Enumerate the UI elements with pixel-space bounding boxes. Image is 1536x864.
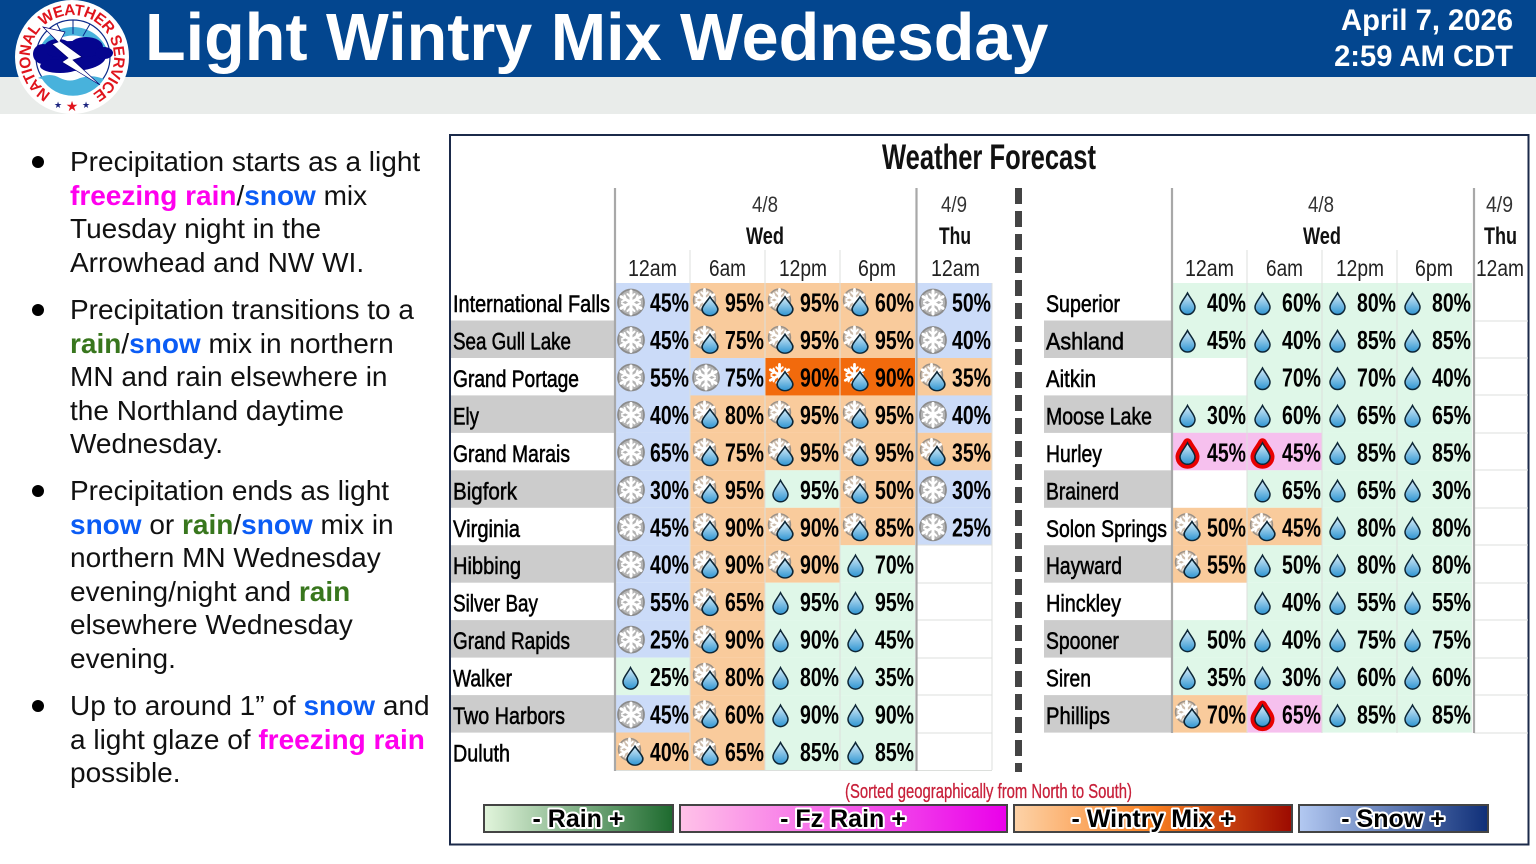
light strip below header [0,77,1536,114]
row: Two Harbors: 60% [725,702,764,730]
row: Silver Bay: 65% [725,589,764,617]
row: Ely: 80% [725,402,764,430]
row: Spooner: 75% [1432,627,1471,655]
row: Aitkin [1046,358,1472,396]
table header: left [628,192,980,281]
row: Moose Lake: 65% [1357,402,1396,430]
row: Virginia: 90% [800,514,839,542]
row: Walker [453,658,915,695]
row: Brainerd: Brainerd [1046,478,1119,505]
bullet: precipitation start [32,146,420,278]
legend: snow [1299,805,1488,833]
bullet: precipitation start: Arrowhead and NW WI. [70,247,364,278]
row: Hayward: Hayward [1046,553,1122,580]
row: Duluth: 40% [650,739,689,767]
row: Hibbing: 90% [725,552,764,580]
title: Light Wintry Mix Wednesday [145,1,1048,75]
row: Bigfork: 50% [875,477,914,505]
bullet: accumulation: Up to around 1” of snow and [70,690,430,721]
row: Grand Portage: 55% [650,364,689,392]
bullet: precipitation transition: the Northland daytime [70,395,344,426]
table header: left: 4/9 [941,192,967,217]
row: Solon Springs: 80% [1432,514,1471,542]
row: Grand Rapids [451,620,915,658]
row: Sea Gull Lake: 45% [650,327,689,355]
row: Walker: 35% [875,664,914,692]
row: Spooner: 50% [1207,627,1246,655]
row: Duluth: 85% [875,739,914,767]
row: Bigfork: 30% [650,477,689,505]
row: Two Harbors: 45% [650,702,689,730]
bullet: accumulation: a light glaze of freezing rain [70,724,425,755]
row: Solon Springs: 50% [1207,514,1246,542]
row: Grand Marais: 95% [800,439,839,467]
row: Two Harbors: 90% [800,702,839,730]
table header: left: 12am [931,255,980,281]
row: International Falls: 50% [952,290,991,318]
row: Grand Rapids: 25% [650,627,689,655]
row: Hibbing: 90% [800,552,839,580]
row: Hayward: 55% [1207,552,1246,580]
row: Sea Gull Lake: Sea Gull Lake [453,328,571,356]
icon: National Weather Service logo: ★ [66,99,78,115]
row: Superior [1046,283,1472,320]
bullet: precipitation transition: Precipitation transitions to a [70,294,414,325]
date and time [1334,5,1513,73]
bullet: precipitation end: Precipitation ends as light [70,475,389,506]
table header: left: Thu [939,223,971,250]
row: Moose Lake: Moose Lake [1046,403,1152,430]
bullet: accumulation [32,690,430,788]
row: Siren: Siren [1046,666,1091,693]
row: Hayward [1044,545,1472,583]
row: Superior: Superior [1046,291,1120,318]
row: Ashland: Ashland [1046,328,1124,356]
legend: wintry mix [1014,805,1292,833]
row: Sea Gull Lake: 95% [875,327,914,355]
row: Aitkin: 70% [1357,364,1396,392]
row: Ely: 95% [800,402,839,430]
row: Grand Marais: 35% [952,439,991,467]
bullet: precipitation transition: rain/snow mix in northern [70,328,394,359]
row: Walker: 25% [650,664,689,692]
row: Moose Lake: 60% [1282,402,1321,430]
row: Grand Portage: 35% [952,364,991,392]
table header: right [1185,192,1524,281]
row: International Falls: 45% [650,290,689,318]
row: Hayward: 80% [1357,552,1396,580]
panel: weather forecast [449,134,1530,846]
row: Hinckley: Hinckley [1046,591,1122,618]
row: Phillips: 85% [1357,702,1396,730]
row: Hayward: 80% [1432,552,1471,580]
row: Brainerd: 65% [1357,477,1396,505]
row: Brainerd: 30% [1432,477,1471,505]
row: Ely: 40% [952,402,991,430]
legend: wintry mix: - Wintry Mix + [1072,805,1234,833]
row: Hinckley: 55% [1432,589,1471,617]
row: Silver Bay: 95% [800,589,839,617]
row: Brainerd: 65% [1282,477,1321,505]
row: Phillips: Phillips [1046,703,1110,730]
row: Bigfork: Bigfork [453,478,518,505]
icon: National Weather Service logo: NATIONAL WEATHER SERVICE [19,4,125,102]
row: Ely: Ely [453,403,480,430]
row: Walker: 80% [800,664,839,692]
row: International Falls: 95% [725,290,764,318]
row: Phillips [1044,695,1472,733]
row: Grand Portage: 90% [800,364,839,392]
row: Grand Marais: 75% [725,439,764,467]
row: Grand Rapids: 90% [725,627,764,655]
row: Siren [1046,658,1472,695]
row: Ely: 40% [650,402,689,430]
bullet: precipitation end: snow or rain/snow mix in [70,509,394,540]
row: Bigfork: 95% [725,477,764,505]
row: Ashland: 40% [1282,327,1321,355]
row: Solon Springs [1046,508,1472,545]
row: Hurley: 45% [1207,439,1246,467]
row: Grand Rapids: 90% [800,627,839,655]
row: Hibbing: Hibbing [453,553,521,580]
row: Sea Gull Lake: 95% [800,327,839,355]
row: Grand Marais: 95% [875,439,914,467]
bullet: precipitation start: Tuesday night in the [70,213,321,244]
row: Grand Portage: 75% [725,364,764,392]
row: Hinckley: 40% [1282,589,1321,617]
legend: freezing rain [680,805,1007,833]
row: Ashland: 85% [1432,327,1471,355]
row: Hurley: Hurley [1046,441,1103,468]
row: Ely: 95% [875,402,914,430]
bullet: precipitation end: elsewhere Wednesday [70,609,353,640]
row: Siren: 30% [1282,664,1321,692]
bullet: precipitation transition [32,294,414,459]
row: Duluth [453,732,915,770]
row: Bigfork [451,470,992,508]
table header: right: Thu [1484,223,1517,250]
row: Moose Lake [1044,395,1472,433]
row: Hibbing: 40% [650,552,689,580]
row: Sea Gull Lake: 40% [952,327,991,355]
row: Phillips: 65% [1282,702,1321,730]
row: Virginia: 45% [650,514,689,542]
row: Superior: 80% [1432,290,1471,318]
table header: right: Wed [1303,223,1341,250]
row: International Falls: International Falls [453,291,610,318]
row: Phillips: 70% [1207,702,1246,730]
row: Silver Bay: 95% [875,589,914,617]
header band [0,0,1536,77]
row: Aitkin: 40% [1432,364,1471,392]
row: Virginia [453,508,992,545]
row: Siren: 35% [1207,664,1246,692]
row: Grand Marais: Grand Marais [453,441,570,468]
bullet: precipitation transition: Wednesday. [70,428,223,459]
row: Hibbing: 70% [875,552,914,580]
row: Superior: 40% [1207,290,1246,318]
table header: left: Wed [746,223,784,250]
row: Grand Rapids: 45% [875,627,914,655]
row: Silver Bay [453,583,915,620]
row: Grand Portage [453,358,992,396]
icon: National Weather Service logo: ★ [54,101,62,111]
row: Spooner: 40% [1282,627,1321,655]
row: Hayward: 50% [1282,552,1321,580]
row: Walker: 80% [725,664,764,692]
legend: rain [484,805,673,833]
row: Sea Gull Lake [451,320,992,358]
row: Sea Gull Lake: 75% [725,327,764,355]
row: Two Harbors [451,695,915,733]
row: International Falls [453,283,992,320]
row: Grand Marais [453,433,992,470]
table header: left: 6am [709,255,746,281]
row: Silver Bay: 55% [650,589,689,617]
row: Grand Portage: Grand Portage [453,366,579,393]
row: Hibbing [451,545,915,583]
row: Duluth: 65% [725,739,764,767]
bullet: precipitation end: northern MN Wednesday [70,542,381,573]
row: Moose Lake: 65% [1432,402,1471,430]
bullet: precipitation end [32,475,394,674]
bullet: precipitation end: evening. [70,643,176,674]
row: Aitkin: 70% [1282,364,1321,392]
row: Phillips: 85% [1432,702,1471,730]
row: Virginia: 25% [952,514,991,542]
heading: Weather Forecast: Weather Forecast [882,138,1096,177]
row: Aitkin: Aitkin [1046,366,1096,393]
icon: National Weather Service logo: ★ [82,101,90,111]
row: Superior: 60% [1282,290,1321,318]
bullet: precipitation start: Precipitation starts as a light [70,146,420,177]
row: Walker: Walker [453,666,512,693]
table header: right: 4/8 [1308,192,1334,217]
row: Grand Portage: 90% [875,364,914,392]
row: Spooner: Spooner [1046,628,1119,655]
row: Two Harbors: 90% [875,702,914,730]
row: Ashland [1044,320,1472,358]
bullet: precipitation transition: MN and rain elsewhere in [70,361,388,392]
table header: left: 12am [628,255,677,281]
row: Siren: 60% [1357,664,1396,692]
row: Bigfork: 95% [800,477,839,505]
row: Silver Bay: Silver Bay [453,591,539,618]
legend: freezing rain: - Fz Rain + [780,805,906,833]
table header: left: 6pm [858,255,896,281]
table header: right: 12pm [1336,255,1384,281]
row: Ashland: 85% [1357,327,1396,355]
row: Ashland: 45% [1207,327,1246,355]
row: Virginia: Virginia [453,516,520,543]
row: Spooner: 75% [1357,627,1396,655]
row: Grand Rapids: Grand Rapids [453,628,570,655]
table header: right: 12am [1185,255,1234,281]
table header: right: 6am [1266,255,1303,281]
row: Hinckley: 55% [1357,589,1396,617]
bullet: precipitation start: freezing rain/snow mix [70,180,367,211]
row: Siren: 60% [1432,664,1471,692]
row: Hurley: 45% [1282,439,1321,467]
row: Virginia: 85% [875,514,914,542]
row: International Falls: 60% [875,290,914,318]
row: Spooner [1044,620,1472,658]
row: Moose Lake: 30% [1207,402,1246,430]
row: International Falls: 95% [800,290,839,318]
row: Duluth: Duluth [453,740,510,768]
legend: snow: - Snow + [1341,805,1445,833]
caption: sort note: (Sorted geographically from North to South) [845,781,1132,803]
row: Solon Springs: Solon Springs [1046,516,1167,543]
table header: right: 4/9 [1486,192,1513,217]
row: Two Harbors: Two Harbors [453,703,565,730]
row: Hurley [1046,433,1472,470]
bullet: accumulation: possible. [70,757,181,788]
table header: left: 4/8 [752,192,778,217]
row: Hinckley [1046,583,1472,620]
row: Brainerd [1044,470,1472,508]
row: Solon Springs: 45% [1282,514,1321,542]
row: Bigfork: 30% [952,477,991,505]
row: Superior: 80% [1357,290,1396,318]
date and time: 2:59 AM CDT [1334,41,1513,73]
row: Hurley: 85% [1357,439,1396,467]
row: Duluth: 85% [800,739,839,767]
bullet: precipitation end: evening/night and rain [70,576,350,607]
row: Hurley: 85% [1432,439,1471,467]
row: Grand Marais: 65% [650,439,689,467]
row: Solon Springs: 80% [1357,514,1396,542]
legend: rain: - Rain + [532,805,624,833]
table header: left: 12pm [779,255,827,281]
row: Virginia: 90% [725,514,764,542]
table header: right: 6pm [1415,255,1453,281]
row: Ely [451,395,992,433]
date and time: April 7, 2026 [1341,5,1513,37]
